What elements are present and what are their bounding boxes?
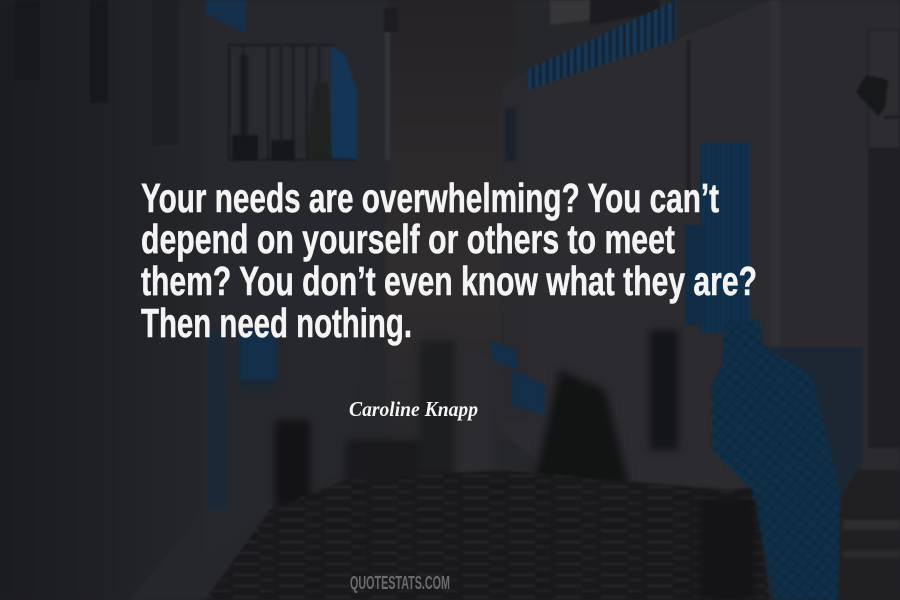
wall pipe: [687, 40, 690, 200]
pillar between building and sky: [385, 30, 390, 160]
small blue awnings: [240, 330, 545, 415]
blue shutters: [685, 143, 750, 333]
left wall: [0, 0, 205, 600]
small window: [505, 108, 516, 161]
far right wall: [778, 0, 900, 600]
author: Caroline Knapp: [349, 397, 478, 421]
right lower steps: [835, 470, 900, 600]
sky and far alley: [385, 0, 515, 440]
quote line 4: Then need nothing.: [141, 300, 412, 346]
left door strip: [208, 330, 226, 510]
cobbled street: [205, 470, 900, 600]
right iron railing: [752, 347, 862, 600]
wall lamp: [856, 75, 900, 118]
left balcony: [228, 44, 357, 160]
left building windows: [14, 0, 178, 145]
left building: [205, 0, 388, 560]
right building: [500, 0, 770, 600]
watermark: QUOTESTATS.COM: [350, 573, 450, 593]
top-right balcony: [527, 0, 676, 90]
lower alley details: [275, 330, 678, 550]
quote line 2: depend on yourself or others to meet: [141, 216, 675, 262]
quote text: [141, 175, 757, 346]
blue twisted gate: [712, 320, 840, 600]
top blue shutter: [205, 0, 246, 32]
